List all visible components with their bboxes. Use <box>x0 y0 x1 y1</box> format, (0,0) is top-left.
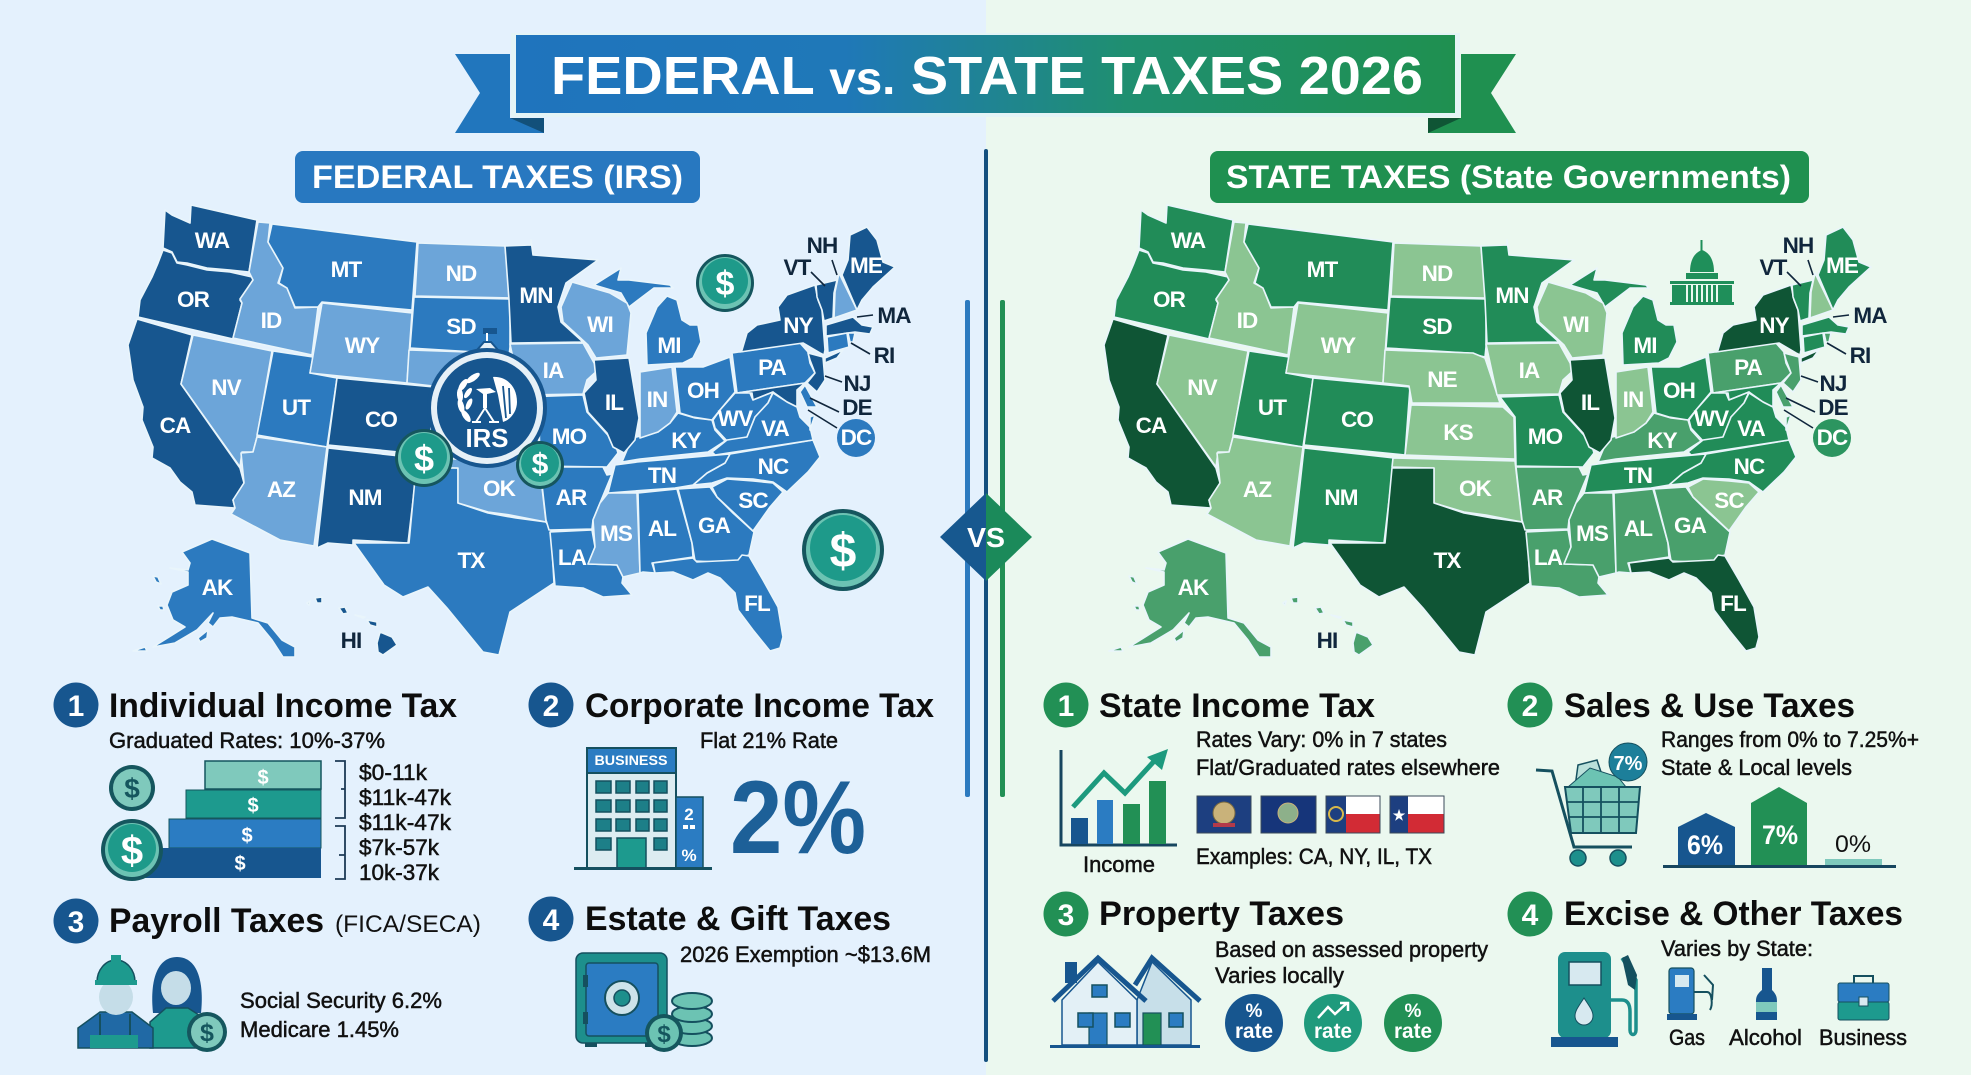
range text: Ranges from 0% to 7.25%+ <box>1661 727 1919 752</box>
icon labels: Gas <box>1669 1025 1705 1050</box>
rate text <box>1196 727 1500 780</box>
icon: shopping cart <box>1536 743 1647 866</box>
flag 4 <box>1390 796 1444 833</box>
icon: stair chart: $ <box>241 825 253 847</box>
rate text: Flat/Graduated rates elsewhere <box>1196 755 1500 780</box>
icon: dollar coin 4: $ <box>830 525 857 578</box>
state labels: KY <box>1647 428 1678 453</box>
state labels: NV <box>211 375 242 400</box>
flag 1 <box>1197 796 1251 833</box>
state labels: RI <box>1850 343 1870 368</box>
state labels: PA <box>758 355 787 380</box>
number badge 1 <box>1044 682 1088 728</box>
heading: Sales & Use Taxes <box>1564 687 1855 725</box>
state labels: RI <box>874 343 894 368</box>
state labels: CO <box>1341 407 1373 432</box>
badge: % <box>1405 1001 1422 1022</box>
state labels: WV <box>1694 406 1729 431</box>
state labels: MN <box>1495 283 1529 308</box>
icon: building: % <box>681 846 697 865</box>
heading: Payroll Taxes <box>109 902 324 940</box>
state labels: LA <box>558 545 587 570</box>
icon: fuel pump <box>1551 952 1637 1047</box>
state labels: WV <box>718 406 753 431</box>
badge <box>1384 994 1442 1052</box>
bracket labels: 10k-37k <box>359 860 440 885</box>
text: rates: Social Security 6.2% <box>240 988 442 1013</box>
icon: stair chart: $ <box>234 853 246 875</box>
icon: workers: $ <box>200 1019 214 1047</box>
number badge 4 <box>1508 892 1552 936</box>
state labels: NY <box>783 313 814 338</box>
state labels: TX <box>458 548 485 573</box>
exemption text: 2026 Exemption ~$13.6M <box>680 942 931 967</box>
state labels: MS <box>600 521 633 546</box>
title: FEDERAL vs. STATE TAXES 2026 <box>551 46 1423 106</box>
state labels: IL <box>1581 390 1600 415</box>
description: Varies by State: <box>1661 936 1813 961</box>
rate text: Flat 21% Rate <box>700 728 838 753</box>
leader lines <box>808 260 873 428</box>
state labels: OR <box>1153 287 1186 312</box>
icon: gas <box>1667 968 1713 1020</box>
rate badges <box>1225 994 1442 1052</box>
icon: stair chart: $ <box>247 795 259 817</box>
icon: briefcase <box>1838 976 1889 1020</box>
badge: % <box>1246 1001 1263 1022</box>
range text: State & Local levels <box>1661 755 1852 780</box>
state labels: MI <box>657 333 681 358</box>
description <box>1215 937 1488 988</box>
state labels: UT <box>282 395 311 420</box>
brackets <box>335 761 345 879</box>
state labels: NJ <box>844 371 870 396</box>
state labels: WI <box>587 312 613 337</box>
state labels: IA <box>543 358 564 383</box>
description: Based on assessed property <box>1215 937 1488 962</box>
icon: stair chart: $ <box>121 829 143 873</box>
heading: federal taxes: FEDERAL TAXES (IRS) <box>312 159 683 195</box>
VS diamond <box>940 493 1032 581</box>
badge <box>1225 994 1283 1052</box>
state labels: MO <box>1528 424 1563 449</box>
state labels: DE <box>842 395 873 420</box>
icon: dollar coin 1 <box>395 429 453 487</box>
state labels: MA <box>877 303 911 328</box>
flag 2 <box>1261 796 1316 833</box>
icon: dollar coin 2 <box>516 441 564 489</box>
icon: building: BUSINESS <box>594 752 668 768</box>
heading: Property Taxes <box>1099 895 1344 933</box>
state labels: IN <box>647 387 667 412</box>
state labels <box>160 228 911 653</box>
state labels: CA <box>1136 413 1167 438</box>
state labels: WY <box>345 333 380 358</box>
state labels: AZ <box>267 477 296 502</box>
heading: Individual Income Tax <box>109 687 457 725</box>
state labels: MI <box>1633 333 1657 358</box>
state labels: AR <box>1532 485 1563 510</box>
icon: IRS badge <box>427 328 547 468</box>
big percent: 2% <box>730 760 866 876</box>
state labels: KS <box>1443 420 1474 445</box>
text: rates <box>240 988 442 1042</box>
state labels: ND <box>446 261 477 286</box>
state labels: AZ <box>1243 477 1272 502</box>
state labels: AK <box>1178 575 1210 600</box>
state labels: OH <box>1663 378 1695 403</box>
state labels: DC <box>1817 425 1848 450</box>
state labels: NH <box>807 233 837 258</box>
state labels: OK <box>483 476 517 501</box>
state labels: AR <box>556 485 587 510</box>
flag 3 <box>1326 796 1380 833</box>
heading: Corporate Income Tax <box>585 687 934 725</box>
state labels <box>1136 228 1887 653</box>
range text <box>1661 727 1919 780</box>
flags <box>1197 796 1444 833</box>
state labels: WY <box>1321 333 1356 358</box>
number badge 3 <box>1044 892 1088 936</box>
icon: dollar coin 1: $ <box>414 438 434 479</box>
number badge 2 <box>528 682 574 728</box>
chart: rates: 6% <box>1687 830 1723 860</box>
icon: capitol <box>1670 240 1734 305</box>
icon labels <box>1669 1025 1907 1050</box>
icon labels: Business <box>1819 1025 1907 1050</box>
state labels: UT <box>1258 395 1287 420</box>
heading: federal taxes <box>295 151 700 203</box>
leader lines <box>1784 260 1849 428</box>
chart label: Income <box>1083 852 1155 877</box>
number badge 4 <box>528 896 574 942</box>
examples text: Examples: CA, NY, IL, TX <box>1196 844 1432 869</box>
state labels: OH <box>687 378 719 403</box>
state labels: NM <box>1324 485 1358 510</box>
state labels: CA <box>160 413 191 438</box>
state labels: GA <box>1674 513 1707 538</box>
number badge 2: 2 <box>1522 690 1538 723</box>
rate text: Rates Vary: 0% in 7 states <box>1196 727 1447 752</box>
icon: dollar coin 4 <box>802 509 884 591</box>
state labels: SD <box>446 314 476 339</box>
panel: corporate income tax <box>528 682 934 876</box>
state labels: AK <box>202 575 234 600</box>
panel: state income tax <box>1044 682 1500 877</box>
icon: dollar coin 3 <box>696 254 754 312</box>
bracket labels: $0-11k <box>359 760 428 785</box>
badge: rate <box>1314 1020 1352 1043</box>
text: rates: Medicare 1.45% <box>240 1017 399 1042</box>
flag 4: ★ <box>1393 807 1406 823</box>
state labels: MT <box>331 257 362 282</box>
federal map <box>128 205 911 657</box>
icon: dollar coin 2: $ <box>532 448 549 481</box>
state labels: LA <box>1534 545 1563 570</box>
state labels: IA <box>1519 358 1540 383</box>
heading: State Income Tax <box>1099 687 1375 725</box>
state labels: ID <box>1237 308 1258 333</box>
number badge 4: 4 <box>543 904 560 937</box>
state labels: CO <box>365 407 397 432</box>
number badge 3 <box>54 898 98 944</box>
state labels: NY <box>1759 313 1790 338</box>
state labels: OR <box>177 287 210 312</box>
state labels: DE <box>1818 395 1849 420</box>
heading: Estate & Gift Taxes <box>585 900 891 938</box>
icon: dollar coin 3: $ <box>716 265 735 303</box>
state labels: GA <box>698 513 731 538</box>
chart: rates: 7% <box>1762 820 1798 850</box>
icon labels: Alcohol <box>1729 1025 1802 1050</box>
bracket labels: $11k-47k <box>359 810 452 835</box>
state labels: AL <box>1624 516 1653 541</box>
panel: excise and other taxes <box>1508 892 1907 1050</box>
state labels: SD <box>1422 314 1452 339</box>
bracket labels: $7k-57k <box>359 835 440 860</box>
number badge 3: 3 <box>1058 899 1074 932</box>
state labels: WA <box>1171 228 1206 253</box>
panel: individual income tax <box>54 682 457 885</box>
heading: Excise & Other Taxes <box>1564 895 1903 933</box>
state labels: FL <box>1720 591 1747 616</box>
icon: building <box>574 748 712 870</box>
number badge 1: 1 <box>1058 690 1074 723</box>
state labels: NE <box>1427 367 1458 392</box>
icon: safe <box>576 953 712 1052</box>
chart: rates <box>1663 787 1896 868</box>
state labels: ME <box>1826 253 1859 278</box>
state labels: ME <box>850 253 883 278</box>
heading: state taxes <box>1210 151 1809 203</box>
state labels: HI <box>1317 628 1337 653</box>
number badge 2 <box>1508 682 1552 728</box>
state labels: NC <box>758 454 789 479</box>
state labels: DC <box>841 425 872 450</box>
icon: stair chart: $ <box>257 767 269 789</box>
chart: rates: 0% <box>1835 831 1871 858</box>
state labels: VA <box>761 416 790 441</box>
center divider <box>940 149 1032 1062</box>
state labels: ND <box>1422 261 1453 286</box>
icon: workers <box>78 955 227 1052</box>
state labels: HI <box>341 628 361 653</box>
state labels: AL <box>648 516 677 541</box>
bracket labels: $11k-47k <box>359 785 452 810</box>
state labels: TN <box>648 463 676 488</box>
heading note: (FICA/SECA) <box>335 911 481 938</box>
VS diamond: VS <box>967 522 1005 553</box>
state labels: TX <box>1434 548 1461 573</box>
badge: rate <box>1235 1020 1273 1043</box>
state labels: MT <box>1307 257 1338 282</box>
state labels: MA <box>1853 303 1887 328</box>
DC marker <box>837 419 875 457</box>
state labels: IN <box>1623 387 1643 412</box>
icon: stair chart: $ <box>124 773 140 804</box>
rate text: Graduated Rates: 10%-37% <box>109 728 385 753</box>
description: Varies locally <box>1215 963 1344 988</box>
chart: income <box>1061 749 1177 845</box>
icon: houses <box>1050 958 1200 1048</box>
icon: safe: $ <box>657 1021 671 1048</box>
state labels: PA <box>1734 355 1763 380</box>
icon: stair chart <box>101 761 321 881</box>
title banner <box>455 33 1516 133</box>
icon: building: 2 <box>684 805 694 824</box>
state labels: VA <box>1737 416 1766 441</box>
state labels: NM <box>348 485 382 510</box>
number badge 2: 2 <box>543 690 559 723</box>
state labels: SC <box>1714 488 1744 513</box>
state labels: FL <box>744 591 771 616</box>
state labels: NV <box>1187 375 1218 400</box>
state labels: OK <box>1459 476 1493 501</box>
state labels: MO <box>552 424 587 449</box>
state labels: NH <box>1783 233 1813 258</box>
bracket labels <box>359 760 452 885</box>
state labels: WI <box>1563 312 1589 337</box>
emblem <box>456 371 517 423</box>
badge <box>1304 994 1362 1052</box>
state labels: WA <box>195 228 230 253</box>
state map <box>1104 205 1887 657</box>
panel: payroll taxes <box>54 898 481 1052</box>
state labels: MN <box>519 283 553 308</box>
state labels: NJ <box>1820 371 1846 396</box>
state labels: KY <box>671 428 702 453</box>
state labels: TN <box>1624 463 1652 488</box>
state labels: NC <box>1734 454 1765 479</box>
state labels: VT <box>784 255 812 280</box>
state labels: IL <box>605 390 624 415</box>
number badge 1: 1 <box>68 690 84 723</box>
number badge 1 <box>54 682 98 728</box>
state labels: ID <box>261 308 282 333</box>
state labels: VT <box>1760 255 1788 280</box>
number badge 4: 4 <box>1522 899 1539 932</box>
icon: IRS badge: IRS <box>466 423 508 453</box>
heading: state taxes: STATE TAXES (State Governments) <box>1226 159 1791 195</box>
panel: sales and use taxes <box>1508 682 1919 868</box>
state labels: SC <box>738 488 768 513</box>
panel: property taxes <box>1044 892 1488 1052</box>
panel: estate and gift taxes <box>528 896 931 1052</box>
icon: alcohol <box>1756 968 1777 1020</box>
DC marker <box>1813 419 1851 457</box>
badge: rate <box>1394 1020 1432 1043</box>
number badge 3: 3 <box>68 906 84 939</box>
icon: shopping cart: 7% <box>1614 753 1643 775</box>
state labels: MS <box>1576 521 1609 546</box>
